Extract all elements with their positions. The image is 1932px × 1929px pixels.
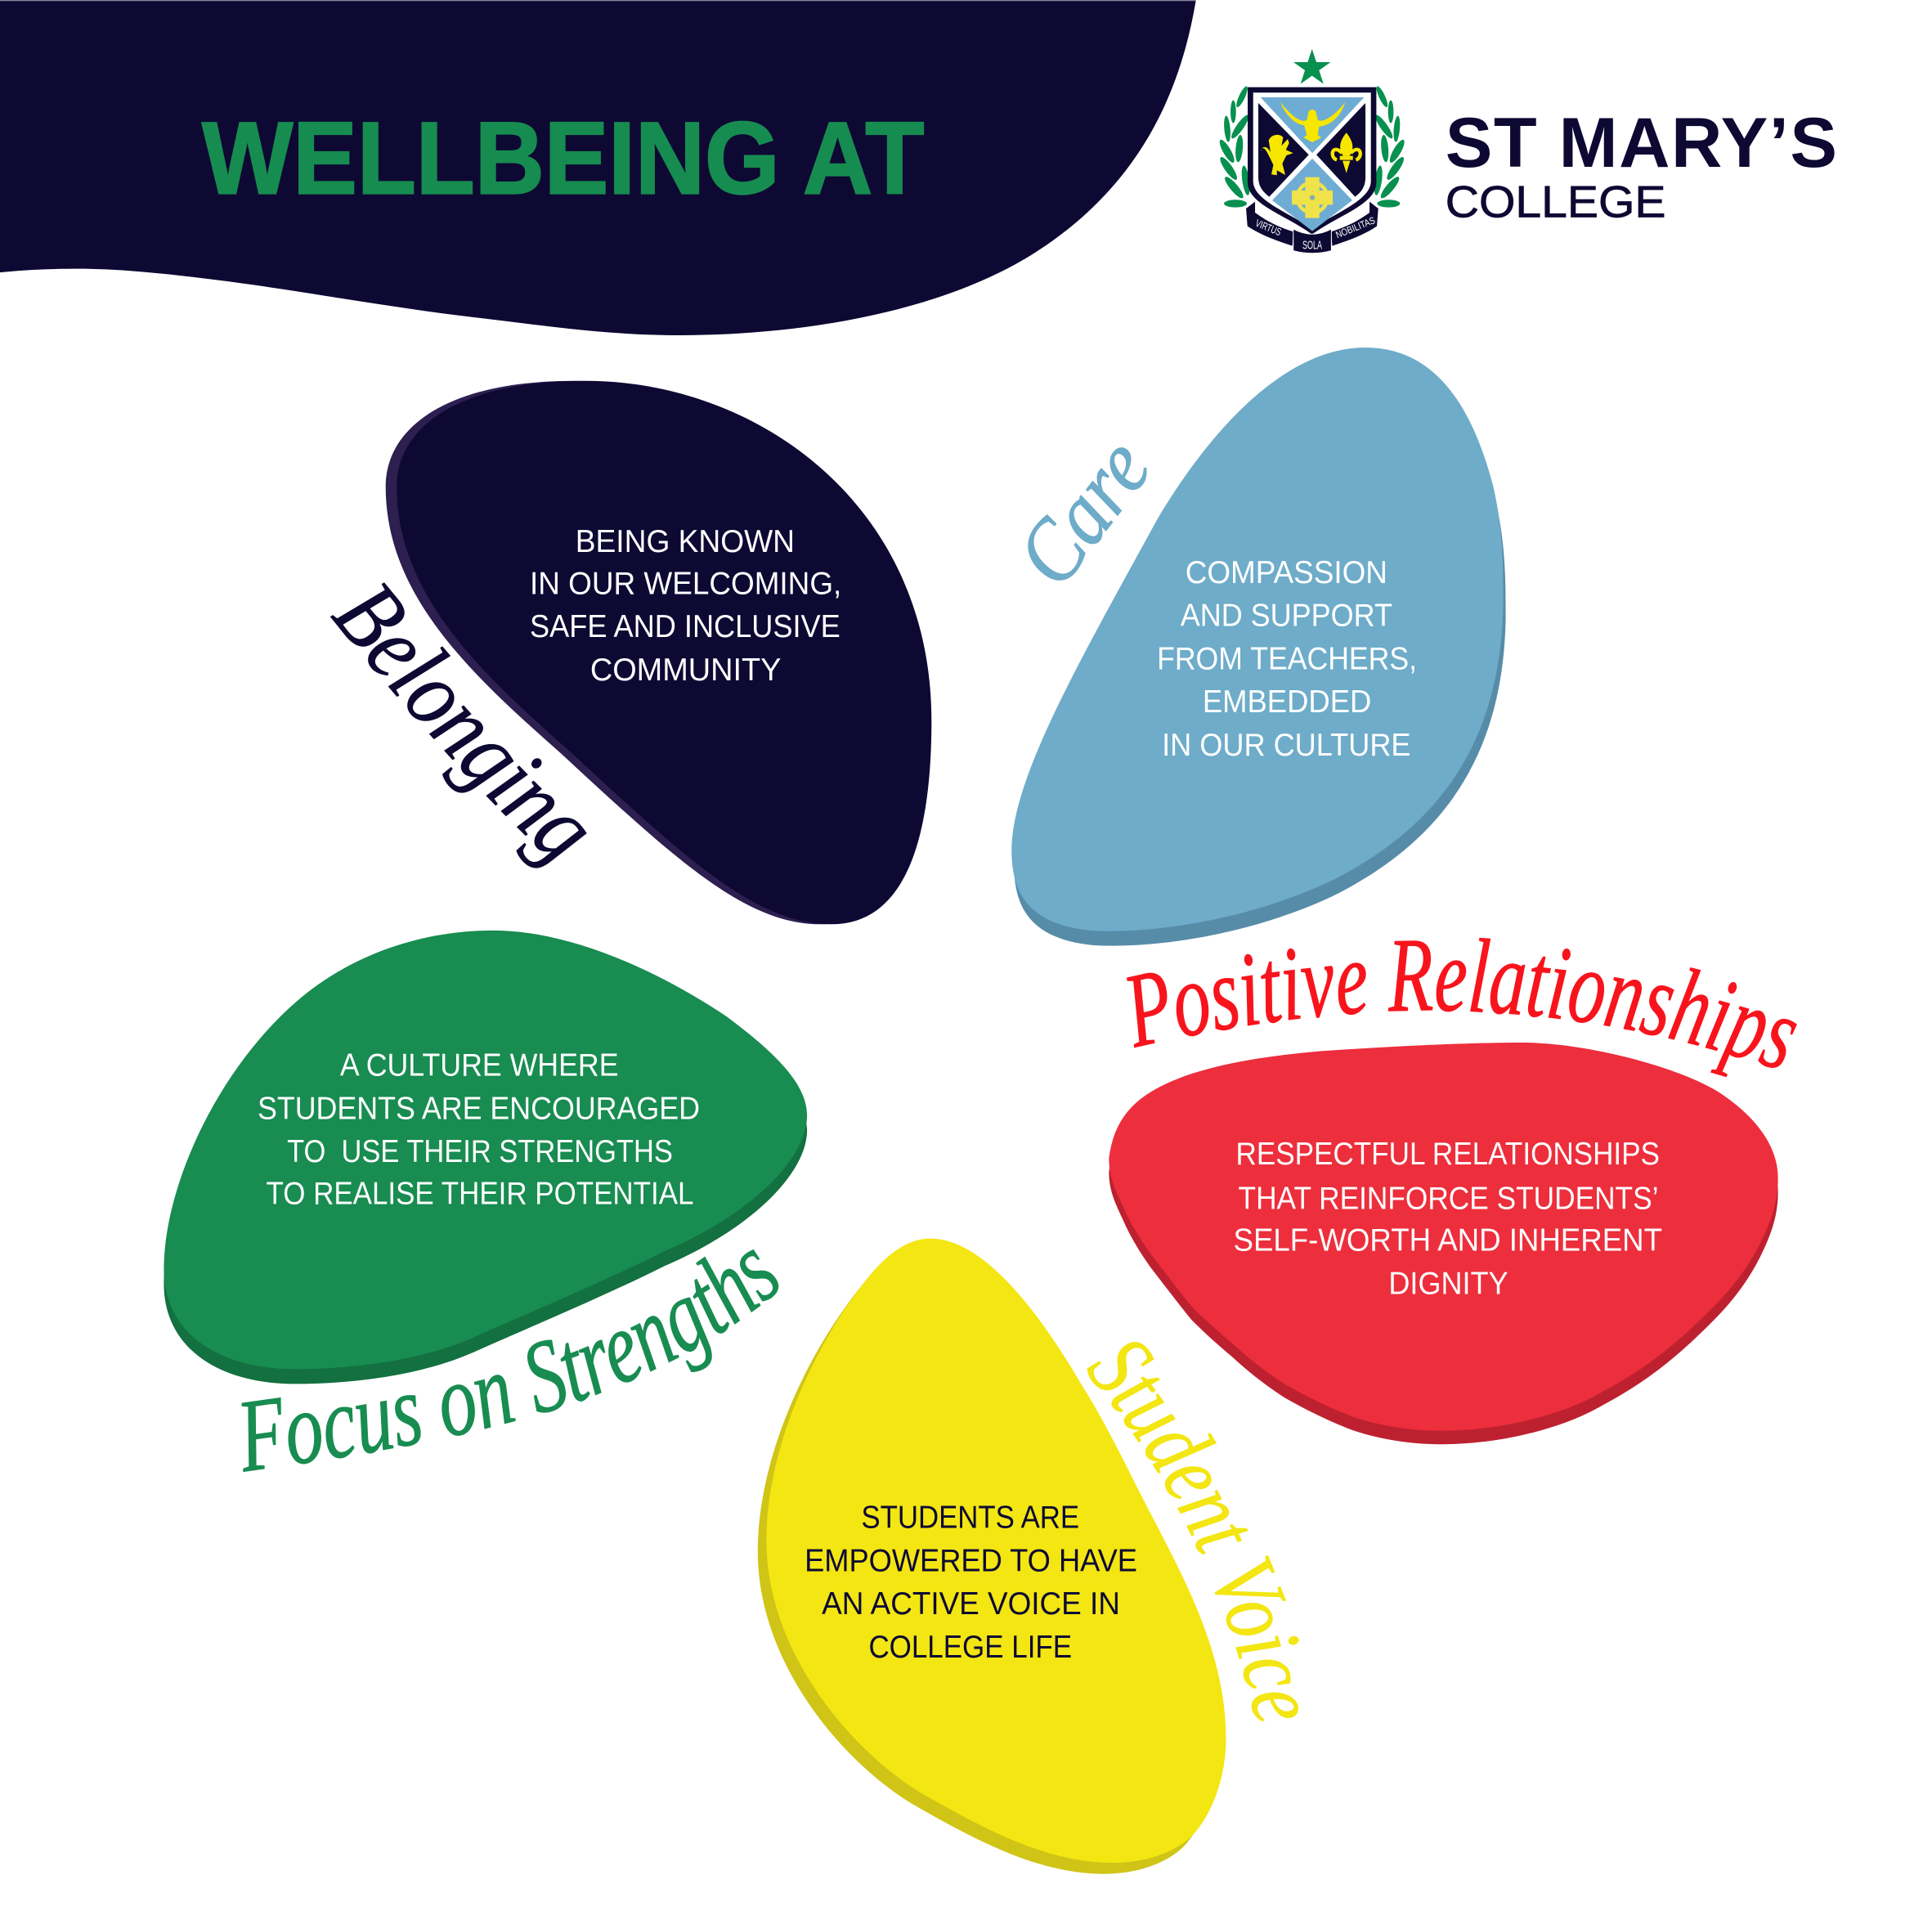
script label: focus on strengths: Focus on Strengths <box>242 1249 778 1472</box>
motto: nobilitas: NOBILITAS <box>1334 214 1377 240</box>
icon: fleur-de-lis <box>1333 132 1360 173</box>
description: RESPECTFUL RELATIONSHIPS <box>1236 1137 1660 1172</box>
icon: laurel right <box>1373 85 1407 208</box>
description: AN ACTIVE VOICE IN <box>822 1586 1120 1622</box>
description <box>1157 555 1417 763</box>
logo: St Mary's College <box>1217 49 1838 253</box>
shield panel: top <box>1261 97 1364 153</box>
description <box>805 1501 1137 1665</box>
petal <box>1109 1043 1778 1431</box>
ribbon: right <box>1331 202 1378 246</box>
petal <box>397 381 931 924</box>
description <box>530 524 841 688</box>
petal shadow <box>164 945 807 1384</box>
icon: dove <box>1280 102 1345 142</box>
description: COMMUNITY <box>590 653 781 688</box>
panel: focus on strengths <box>164 931 808 1472</box>
panel: belonging <box>330 381 932 924</box>
icon: crest <box>1217 49 1407 253</box>
motto: sola: SOLA <box>1302 240 1322 253</box>
script label: belonging: Belonging <box>330 582 587 868</box>
icon: lion <box>1261 135 1293 175</box>
petal shadow <box>758 1249 1217 1874</box>
description <box>1234 1137 1662 1301</box>
shield panel: bottom <box>1272 159 1352 231</box>
description: COMPASSION <box>1186 555 1387 590</box>
description: STUDENTS ARE ENCOURAGED <box>258 1091 700 1126</box>
header banner <box>0 0 1196 335</box>
icon: laurel left <box>1217 85 1252 208</box>
petal <box>766 1239 1226 1863</box>
icon: star <box>1293 49 1330 84</box>
description: AND SUPPORT <box>1181 599 1392 634</box>
title: WELLBEING AT <box>202 101 924 216</box>
description: IN OUR WELCOMING, <box>530 566 841 601</box>
description: SAFE AND INCLUSIVE <box>530 609 840 644</box>
icon: celtic cross <box>1292 177 1333 218</box>
description: FROM TEACHERS, <box>1157 641 1417 676</box>
description: THAT REINFORCE STUDENTS’ <box>1239 1181 1658 1216</box>
description: EMBEDDED <box>1203 684 1371 720</box>
petal shadow <box>1014 362 1506 946</box>
description: IN OUR CULTURE <box>1162 728 1411 763</box>
panel: positive relationships <box>1109 937 1797 1444</box>
shield panel: right <box>1316 103 1365 197</box>
panel: care <box>1011 348 1506 946</box>
icon: shield <box>1248 87 1376 235</box>
petal shadow <box>1109 1056 1778 1444</box>
description: COLLEGE LIFE <box>868 1630 1072 1665</box>
description: EMPOWERED TO HAVE <box>805 1543 1137 1578</box>
petal <box>164 931 807 1369</box>
description: STUDENTS ARE <box>861 1501 1079 1536</box>
wordmark: St Mary's: ST MARY’S <box>1446 104 1838 182</box>
description: SELF-WORTH AND INHERENT <box>1234 1223 1662 1258</box>
ribbon: centre <box>1293 229 1331 253</box>
description: TO REALISE THEIR POTENTIAL <box>267 1176 693 1211</box>
ribbon: left <box>1246 202 1293 246</box>
script label: care: Care <box>1028 447 1147 581</box>
petal <box>1011 348 1504 931</box>
description: BEING KNOWN <box>576 524 795 559</box>
petal shadow <box>386 381 921 924</box>
description: TO USE THEIR STRENGTHS <box>287 1134 673 1169</box>
panel: student voice <box>757 1238 1299 1874</box>
motto: virtus: VIRTUS <box>1253 218 1283 238</box>
shield panel: left <box>1258 103 1309 197</box>
wordmark: College: COLLEGE <box>1446 177 1665 227</box>
script label: student voice: Student Voice <box>1087 1342 1299 1722</box>
description <box>258 1048 700 1211</box>
description: A CULTURE WHERE <box>340 1048 619 1083</box>
script label: positive relationships: Positive Relationships <box>1127 937 1797 1078</box>
description: DIGNITY <box>1388 1266 1508 1301</box>
